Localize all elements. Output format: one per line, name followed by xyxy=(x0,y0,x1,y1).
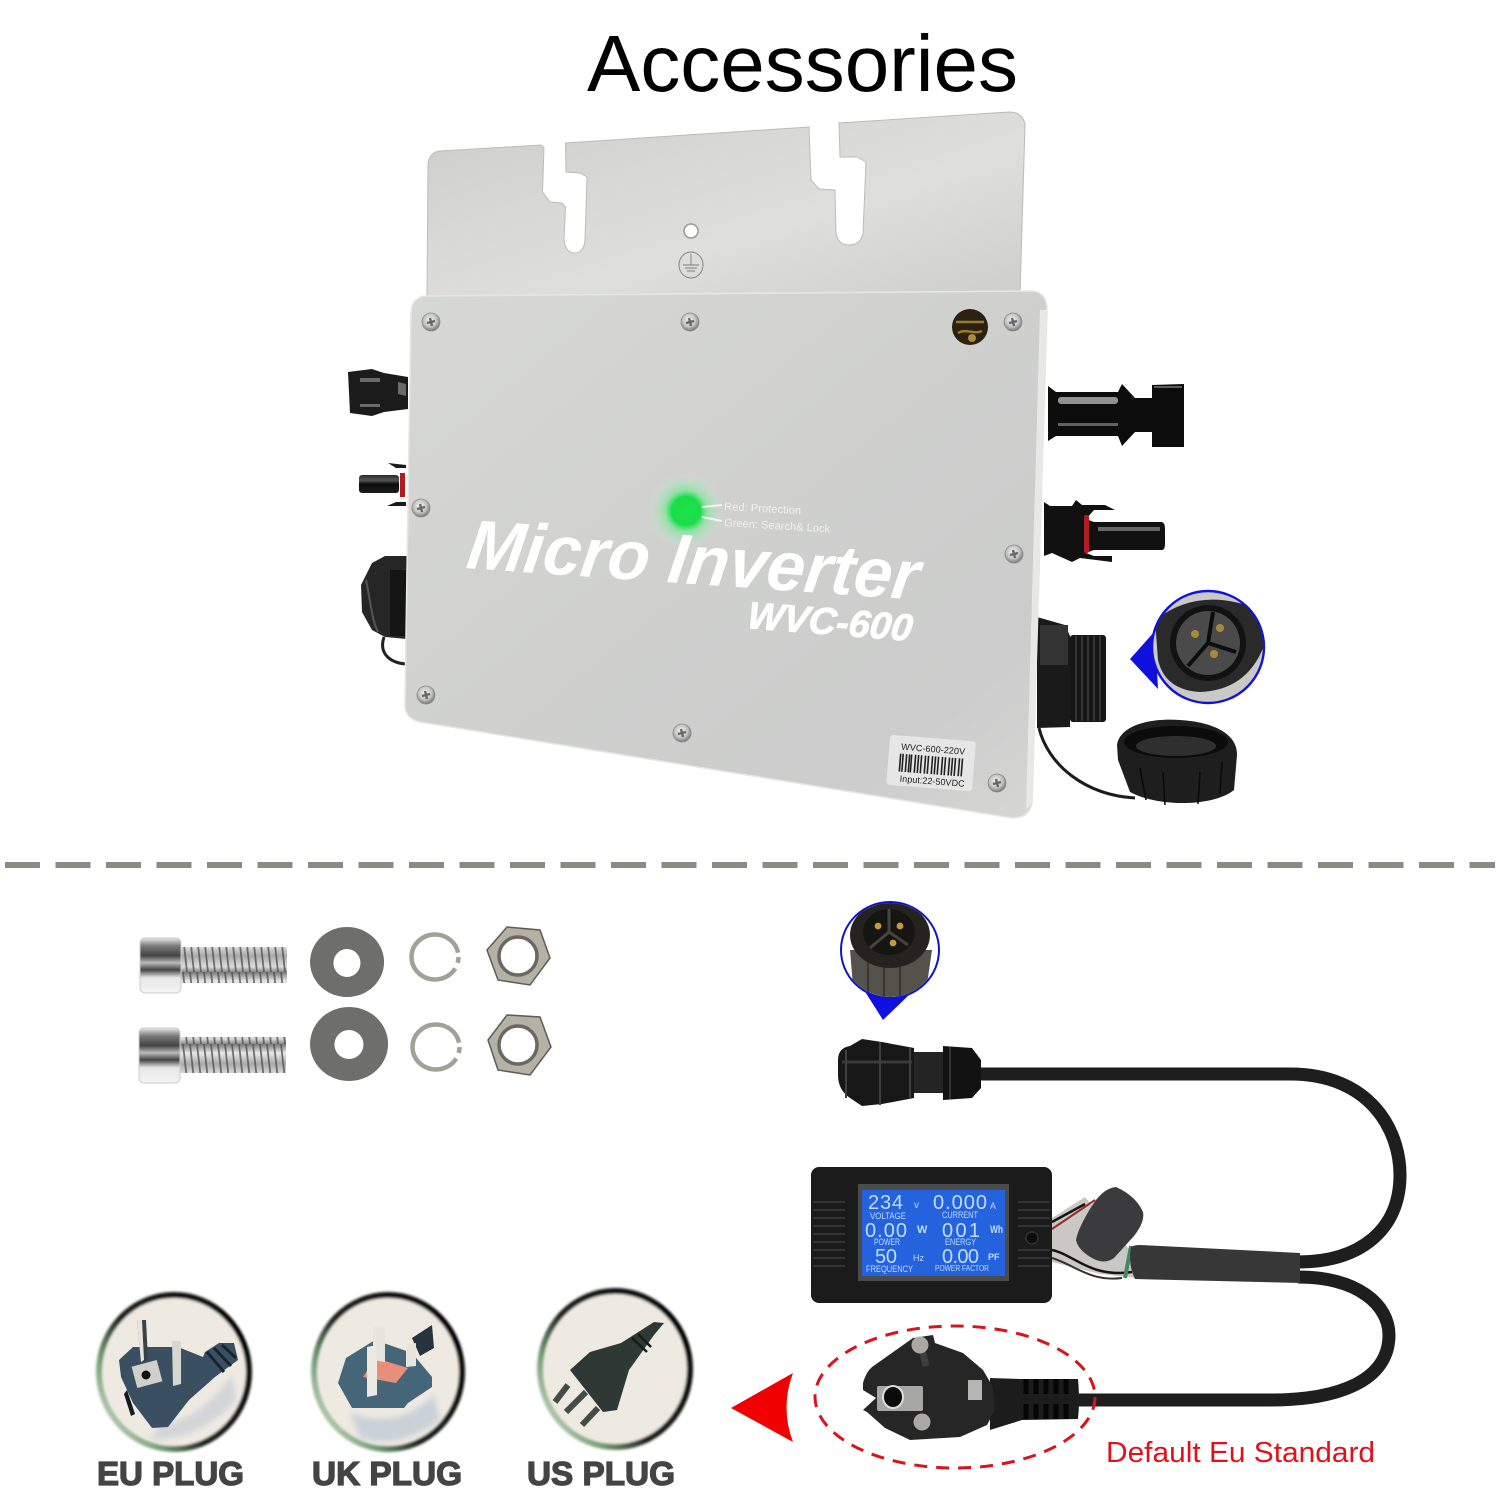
LCD screen: 001 xyxy=(942,1220,980,1242)
meter side ribs xyxy=(813,1202,1050,1266)
power cable xyxy=(978,1074,1400,1400)
power meter xyxy=(811,1167,1052,1303)
LCD screen: PF xyxy=(988,1252,1000,1262)
washer 1 xyxy=(310,927,384,997)
LCD screen: VOLTAGE xyxy=(870,1211,906,1221)
LED legend: Green: Search& Lock xyxy=(724,517,831,535)
LCD screen: ENERGY xyxy=(945,1237,976,1247)
LCD screen: 50 xyxy=(875,1246,897,1268)
product name: Micro Inverter xyxy=(463,506,928,615)
spring washer 1 xyxy=(412,934,458,980)
LCD screen: 0.00 xyxy=(865,1220,907,1242)
screws xyxy=(412,313,1023,792)
red arrow xyxy=(731,1373,793,1442)
right connector upper xyxy=(1048,384,1184,447)
inverter main plate xyxy=(405,291,1047,818)
right connector lower xyxy=(1044,500,1165,562)
LCD screen: 234 xyxy=(868,1192,903,1214)
LCD screen: v xyxy=(914,1200,919,1211)
wiring to power meter xyxy=(1052,1197,1135,1279)
plug label: UK: UK PLUG xyxy=(312,1455,462,1492)
callout: inverter socket xyxy=(1130,591,1266,703)
LCD screen xyxy=(862,1190,1005,1276)
LCD screen: Wh xyxy=(990,1224,1003,1236)
bolt 1 xyxy=(140,938,287,993)
divider xyxy=(5,862,1495,868)
heat-shrink sleeve xyxy=(1130,1245,1300,1283)
title: Accessories xyxy=(587,19,1018,108)
callout: cable connector pins xyxy=(841,902,939,1020)
hex nut 1 xyxy=(487,927,550,985)
inverter-side connector xyxy=(838,1039,981,1106)
plug label: US: US PLUG xyxy=(527,1455,675,1492)
product: micro inverter xyxy=(348,112,1237,818)
plug option: UK xyxy=(314,1295,462,1449)
plug option: EU xyxy=(99,1295,249,1449)
barcode label: WVC-600-220V xyxy=(901,742,965,757)
status LED xyxy=(648,473,724,549)
mounting hardware xyxy=(139,927,551,1083)
spring washer 2 xyxy=(412,1024,460,1070)
LCD screen: CURRENT xyxy=(942,1210,978,1220)
left connector lower xyxy=(359,463,406,506)
LCD screen: FREQUENCY xyxy=(866,1264,913,1274)
mounting bracket xyxy=(427,112,1025,298)
plug label: EU: EU PLUG xyxy=(97,1455,244,1492)
icon: ground symbol xyxy=(679,252,703,278)
LCD screen: A xyxy=(990,1201,996,1211)
dashed ellipse highlight xyxy=(815,1326,1095,1468)
LCD screen: Hz xyxy=(913,1253,924,1263)
LCD screen: 0.00 xyxy=(942,1246,979,1268)
bolt 2 xyxy=(139,1028,286,1083)
LED legend xyxy=(724,501,831,535)
default standard note: Default Eu Standard xyxy=(1106,1437,1375,1469)
LCD screen: 0.000 xyxy=(933,1192,987,1214)
LCD screen: W xyxy=(917,1224,928,1236)
model name: WVC-600 xyxy=(745,595,915,650)
right threaded gland xyxy=(1037,617,1106,728)
left cable gland xyxy=(361,556,407,664)
LED legend: Red: Protection xyxy=(724,501,801,517)
protective cap xyxy=(1117,720,1237,805)
barcode label xyxy=(886,735,976,791)
washer 2 xyxy=(310,1007,388,1081)
LCD screen: POWER xyxy=(874,1237,900,1247)
barcode label: Input:22-50VDC xyxy=(899,774,965,789)
vent: gold breather xyxy=(952,309,988,345)
plug option: US xyxy=(540,1291,690,1447)
ferrite core xyxy=(1076,1187,1143,1262)
hex nut 2 xyxy=(488,1015,551,1075)
left connector upper xyxy=(348,369,408,416)
LCD screen: POWER FACTOR xyxy=(935,1263,989,1273)
default EU plug xyxy=(863,1335,1079,1440)
right cable cap strap xyxy=(1039,728,1135,798)
